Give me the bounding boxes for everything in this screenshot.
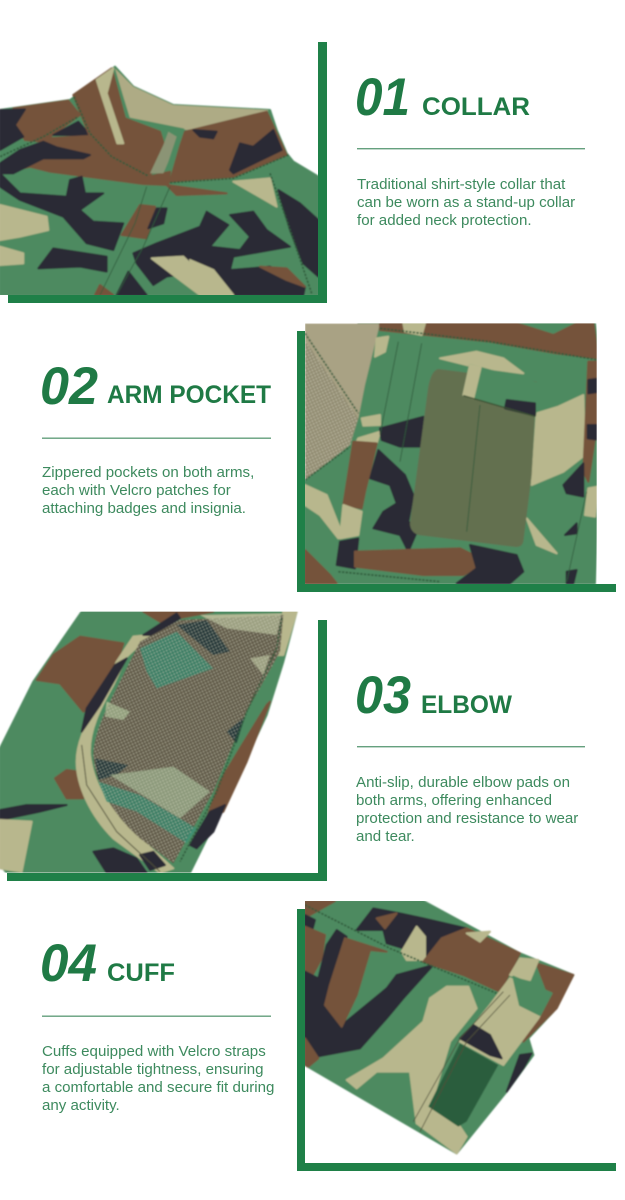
description: elbow: protection and resistance to wear	[356, 810, 578, 827]
photo: camouflage collar	[0, 67, 318, 295]
description: arm pocket: Zippered pockets on both arms,	[42, 464, 254, 481]
heading: cuff: CUFF	[107, 959, 175, 987]
panel: cuff	[40, 901, 616, 1171]
description: elbow: Anti-slip, durable elbow pads on	[356, 774, 570, 791]
heading: collar: COLLAR	[422, 93, 530, 121]
feature number 03: 03	[355, 666, 411, 725]
description: cuff: any activity.	[42, 1097, 120, 1114]
description: collar: Traditional shirt-style collar that	[357, 176, 566, 193]
description: arm pocket: attaching badges and insignia.	[42, 500, 246, 517]
panel: elbow	[0, 612, 585, 881]
photo frame: elbow	[7, 620, 327, 881]
photo frame: cuff	[297, 909, 616, 1171]
photo: arm pocket with velcro patch	[305, 323, 600, 583]
description: collar: can be worn as a stand-up collar	[357, 194, 575, 211]
feature number 01: 01	[355, 68, 410, 127]
description: cuff: a comfortable and secure fit during	[42, 1079, 274, 1096]
heading: arm pocket: ARM POCKET	[107, 381, 271, 409]
description: arm pocket: each with Velcro patches for	[42, 482, 231, 499]
photo: elbow pad with mesh	[0, 612, 297, 873]
panel: collar	[0, 42, 585, 303]
photo frame: arm pocket	[297, 331, 616, 592]
description: collar: for added neck protection.	[357, 212, 532, 229]
feature number 02: 02	[40, 357, 98, 416]
description: elbow: both arms, offering enhanced	[356, 792, 552, 809]
heading: elbow: ELBOW	[421, 691, 512, 719]
feature number 04: 04	[40, 934, 97, 993]
description: cuff: Cuffs equipped with Velcro straps	[42, 1043, 266, 1060]
photo frame: collar	[8, 42, 327, 303]
description: cuff: for adjustable tightness, ensuring	[42, 1061, 264, 1078]
panel: arm pocket	[40, 323, 616, 592]
description: elbow: and tear.	[356, 828, 415, 845]
photo: cuff with velcro strap	[305, 901, 573, 1153]
